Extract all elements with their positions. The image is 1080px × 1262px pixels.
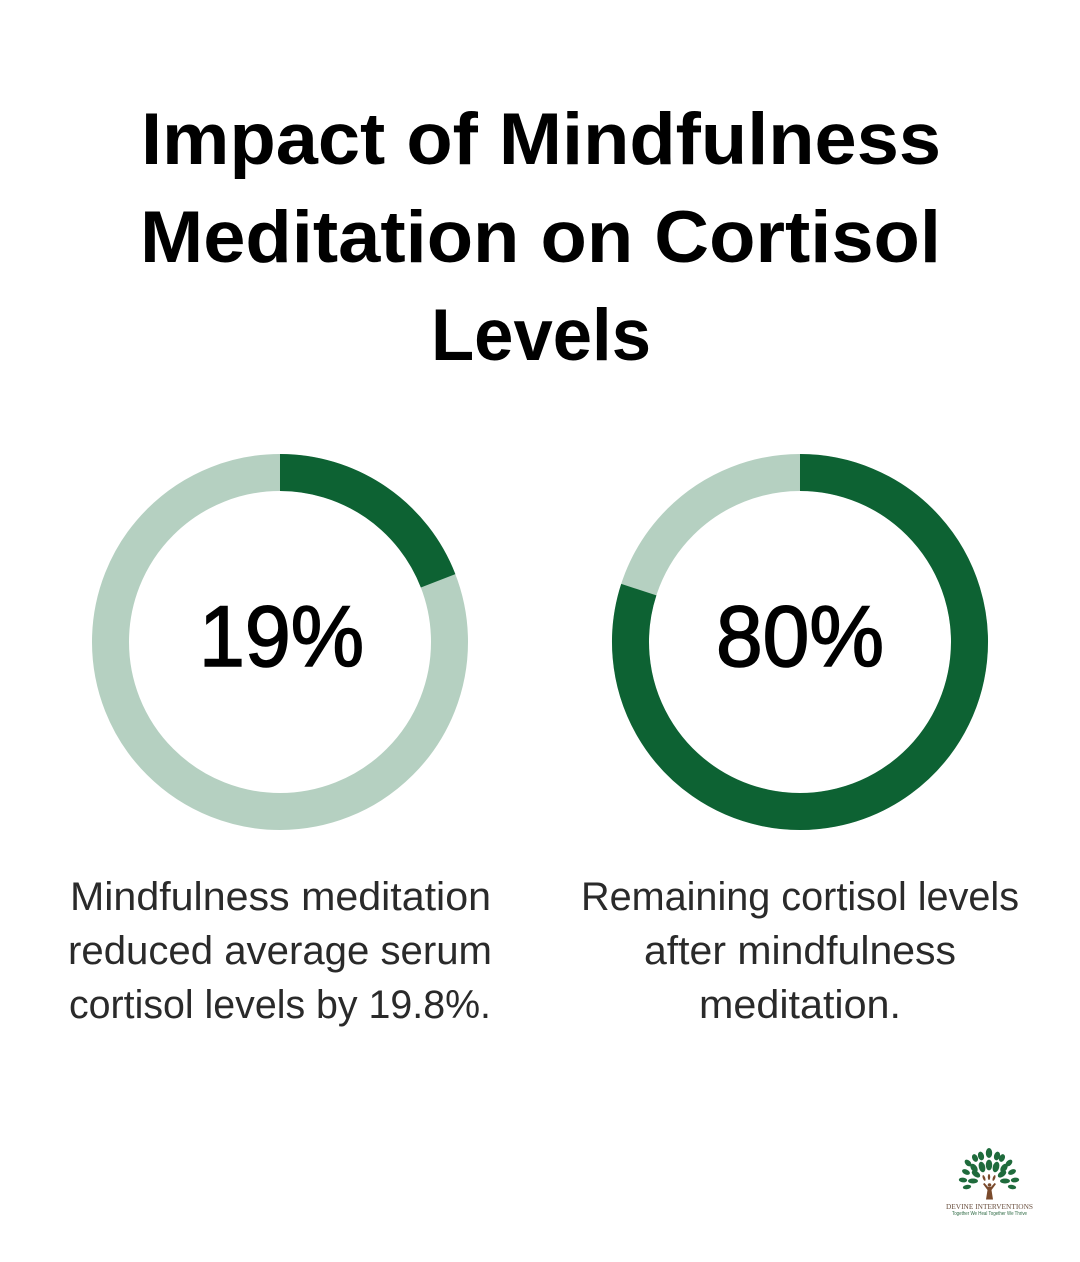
- logo: Devine Interventions: [946, 1148, 1033, 1217]
- logo wordmark: DEVINE INTERVENTIONS: [946, 1203, 1033, 1211]
- value: 19%: 19%: [199, 589, 364, 685]
- panel: 80% statistic: [581, 472, 1019, 1027]
- title: Meditation on Cortisol: [140, 197, 941, 278]
- caption: 19%: [68, 875, 492, 1027]
- title: Impact of Mindfulness: [141, 99, 941, 180]
- caption: 19%: Mindfulness meditation: [70, 875, 491, 919]
- caption: 80%: [581, 875, 1019, 1027]
- panel: 19% statistic: [68, 472, 492, 1027]
- title: Levels: [431, 295, 651, 376]
- donut chart: 19%: [110, 472, 450, 812]
- caption: 80%: after mindfulness: [644, 929, 956, 973]
- caption: 19%: cortisol levels by 19.8%.: [69, 983, 491, 1027]
- logo tagline: Together We Heal Together We Thrive: [952, 1211, 1027, 1217]
- icon: tree: [959, 1148, 1019, 1200]
- caption: 80%: Remaining cortisol levels: [581, 875, 1019, 919]
- value: 80%: 80%: [716, 589, 884, 685]
- caption: 80%: meditation.: [699, 983, 901, 1027]
- caption: 19%: reduced average serum: [68, 929, 492, 973]
- title: [140, 99, 941, 376]
- donut chart: 80%: [630, 472, 970, 812]
